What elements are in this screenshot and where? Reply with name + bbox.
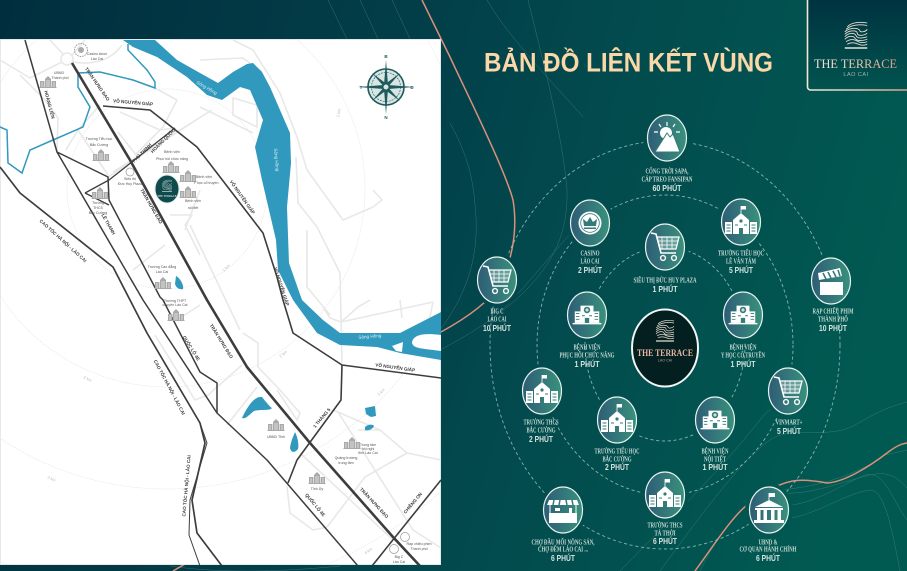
node: Big C Lào Cai: LÀO CAI — [488, 316, 507, 324]
node: Casino Lào Cai: CASINO — [580, 250, 600, 258]
node: Bệnh viện Nội tiết: NỘI TIẾT — [704, 456, 726, 464]
node: Chợ đầu mối nông sản: CHỢ ĐÊM LÀO CAI ... — [538, 546, 588, 554]
map points of interest: Y học cổ truyền — [194, 181, 218, 185]
node: Big C Lào Cai: 10 PHÚT — [483, 322, 512, 333]
roads — [0, 40, 441, 566]
node: Trường THCS Bắc Cường: TRƯỜNG THCS — [524, 418, 559, 426]
node: Trường Tiểu học Lê Văn Tám — [718, 199, 764, 275]
map project marker — [155, 175, 179, 203]
node: Rạp chiếu phim Thành phố — [812, 258, 854, 333]
node: Big C Lào Cai: BIG C — [490, 308, 504, 316]
map points of interest: Đức Huy Plaza — [118, 182, 142, 186]
node: Bệnh viện Phục hồi chức năng: 1 PHÚT — [574, 358, 600, 369]
node: Casino Lào Cai — [570, 200, 610, 275]
node: Chợ đầu mối nông sản: 6 PHÚT — [551, 552, 576, 563]
map points of interest: Lào Cai — [156, 270, 168, 274]
node: Bệnh viện Y học cổ truyền: 1 PHÚT — [730, 358, 756, 369]
map points of interest: Phục hồi chức năng — [156, 157, 188, 161]
node: Siêu thị Đức Huy Plaza — [634, 224, 696, 294]
node: Bệnh viện Nội tiết: BỆNH VIỆN — [702, 448, 728, 456]
node: Rạp chiếu phim Thành phố: RẠP CHIẾU PHIM — [812, 308, 854, 316]
node: Trường THCS Tả Thời: 6 PHÚT — [653, 535, 678, 546]
map panel: 1 km — [221, 263, 231, 273]
logo box: THE TERRACE — [814, 57, 897, 71]
road labels: TRẦN HƯNG ĐẠO — [209, 323, 235, 360]
node: Bệnh viện Nội tiết — [696, 397, 734, 472]
node: Trường THCS Tả Thời: TRƯỜNG THCS — [648, 522, 683, 530]
node: Siêu thị Đức Huy Plaza: 1 PHÚT — [652, 283, 678, 294]
map points of interest: THCS — [93, 206, 103, 210]
node: Siêu thị Đức Huy Plaza: SIÊU THỊ ĐỨC HUY PLAZA — [634, 276, 696, 284]
road labels: 1 THÁNG 5 — [311, 406, 332, 429]
node: Casino Lào Cai: LÀO CAI — [580, 258, 600, 266]
node: Cổng Trời Sapa — [642, 115, 692, 193]
map panel: 3 km — [376, 387, 386, 397]
map panel: 2 km — [278, 349, 288, 359]
node: Vinmart+: VINMART+ — [776, 418, 803, 426]
node: Rạp chiếu phim Thành phố: THÀNH PHỐ — [818, 316, 848, 324]
map points of interest: Trung tâm — [360, 443, 376, 447]
map points of interest: Casino Aeon — [87, 52, 107, 56]
node: Rạp chiếu phim Thành phố: 10 PHÚT — [819, 322, 848, 333]
road labels: CAO TỐC HÀ NỘI - LÀO CAI — [153, 358, 188, 416]
road labels: QUỐC LỘ 4E — [182, 334, 203, 362]
compass rose: B — [384, 54, 388, 59]
logo box — [808, 0, 907, 90]
map points of interest: Rạp chiếu phim — [407, 542, 431, 546]
road labels: VÕ NGUYÊN GIÁP — [273, 266, 292, 306]
map points of interest: Lào Cai — [393, 560, 405, 564]
node: Big C Lào Cai — [478, 257, 516, 333]
road labels: VÕ NGUYÊN GIÁP — [229, 178, 257, 215]
node: Bệnh viện Phục hồi chức năng: BỆNH VIỆN — [574, 344, 600, 352]
node: UBND và cơ quan hành chính: UBND & — [758, 538, 778, 546]
map points of interest: UBND — [54, 71, 64, 75]
map points of interest: tỉnh Lào Cai — [358, 451, 378, 455]
node: Cổng Trời Sapa: CỔNG TRỜI SAPA, — [646, 168, 689, 176]
map points of interest: Trường Cao đẳng — [148, 264, 176, 269]
road labels: HOÀNG LIÊN — [43, 90, 58, 120]
map panel: 4 km — [363, 546, 374, 555]
node: Trường Tiểu học Bắc Cường — [594, 397, 640, 472]
map project marker: THE TERRACE — [158, 195, 177, 198]
road labels: CAO TỐC HÀ NỘI - LÀO CAI — [179, 455, 192, 517]
centre logo: THE TERRACE — [637, 348, 693, 358]
road labels: PHÚ THỊNH — [131, 141, 153, 164]
road labels: VÕ NGUYÊN GIÁP — [375, 360, 416, 373]
map points of interest: Trường THPT — [164, 299, 187, 303]
map points of interest: Bắc Cường — [89, 210, 107, 215]
road labels: QUỐC LỘ 4E — [304, 491, 328, 517]
node: Cổng Trời Sapa: 60 PHÚT — [652, 182, 682, 193]
dashed distance rings — [490, 141, 840, 549]
road labels: CHIỀNG ON — [402, 490, 424, 515]
map points of interest: Bệnh viện — [164, 150, 180, 154]
node: Vinmart+: 5 PHÚT — [777, 425, 802, 436]
road labels — [38, 66, 424, 519]
node: Trường Tiểu học Bắc Cường: TRƯỜNG TIỂU HỌC — [594, 448, 640, 456]
node: Cổng Trời Sapa: CÁP TREO FANSIPAN — [642, 176, 692, 184]
node: Bệnh viện Y học cổ truyền: BỆNH VIỆN — [730, 344, 756, 352]
node: Chợ đầu mối nông sản — [532, 487, 595, 563]
map points of interest: Trường — [92, 201, 104, 205]
node: Trường THCS Bắc Cường — [522, 368, 562, 444]
node: Bệnh viện Y học cổ truyền — [721, 292, 765, 369]
map points of interest: Trường Tiểu học — [86, 137, 113, 141]
node: Trường THCS Tả Thời — [646, 472, 684, 546]
map points of interest: Bệnh viện — [185, 199, 201, 203]
node: UBND và cơ quan hành chính: CƠ QUAN HÀNH CHÍNH — [740, 546, 797, 554]
river: Sông Hồng — [0, 40, 441, 360]
node: UBND và cơ quan hành chính: 6 PHÚT — [756, 552, 781, 563]
node: Trường THCS Bắc Cường: BẮC CƯỜNG — [526, 426, 556, 434]
river: Sông Hồng: Sông Hồng — [196, 80, 218, 96]
node: Chợ đầu mối nông sản: CHỢ ĐẦU MỐI NÔNG SẢN, — [532, 538, 595, 546]
compass rose: T — [360, 85, 363, 90]
map points of interest: Bắc Cường — [90, 142, 108, 147]
node: Bệnh viện Phục hồi chức năng: PHỤC HỒI CHỨC NĂNG — [560, 352, 615, 360]
node: UBND và cơ quan hành chính — [740, 487, 797, 563]
road labels: TRẦN HƯNG ĐẠO — [84, 66, 112, 102]
lakes — [175, 276, 376, 452]
map points of interest: chuyên Lào Cai — [163, 303, 188, 307]
map points of interest: hội nghị — [362, 447, 374, 451]
map points of interest: Bệnh viện — [196, 175, 212, 179]
node: Trường THCS Bắc Cường: 2 PHÚT — [529, 433, 554, 444]
map panel: 2 km — [83, 374, 93, 383]
logo box: LAO CAI — [843, 72, 869, 78]
node: Bệnh viện Nội tiết: 1 PHÚT — [702, 461, 728, 472]
map points of interest: trung tâm — [338, 461, 354, 465]
centre logo — [632, 310, 698, 386]
map points of interest: Siêu thị — [124, 177, 136, 181]
map panel: 2 km — [335, 107, 342, 117]
river: Sông Hồng: Sông Hồng — [273, 148, 280, 172]
road labels: CAO TỐC HÀ NỘI - LÀO CAI — [38, 217, 89, 263]
map panel — [0, 39, 441, 565]
map panel: 3 km — [47, 475, 57, 483]
road labels: LÊ THANH — [100, 212, 118, 236]
node: Trường Tiểu học Lê Văn Tám: 5 PHÚT — [729, 264, 754, 275]
map points of interest: nội tiết — [188, 206, 198, 210]
map points of interest — [40, 44, 431, 564]
compass rose — [358, 54, 414, 120]
node: Casino Lào Cai: 2 PHÚT — [578, 264, 603, 275]
map points of interest: UBND Tỉnh — [267, 435, 285, 439]
node: Bệnh viện Y học cổ truyền: Y HỌC CỔ TRUYỀN — [721, 352, 765, 360]
compass rose: Đ — [410, 85, 414, 90]
map points of interest: Thành phố — [51, 76, 69, 80]
river: Sông Hồng: Sông Hồng — [358, 333, 382, 340]
node: Vinmart+ — [768, 368, 808, 436]
map points of interest: Tỉnh Ủy — [311, 486, 323, 491]
node: Trường Tiểu học Lê Văn Tám: TRƯỜNG TIỂU HỌC — [718, 250, 764, 258]
node halos — [473, 111, 855, 537]
road labels: HOÀNG QUỐC — [149, 127, 177, 154]
road labels: TRẦN HƯNG ĐẠO — [359, 486, 390, 519]
map points of interest: Lào Cai — [91, 57, 103, 61]
map points of interest: Big C — [395, 555, 404, 559]
map points of interest: Thành phố — [410, 547, 428, 551]
node: Trường Tiểu học Lê Văn Tám: LÊ VĂN TÁM — [726, 258, 756, 266]
compass rose: N — [384, 115, 388, 120]
road labels: VÕ NGUYÊN GIÁP — [113, 96, 153, 107]
map points of interest: Quảng trường — [335, 456, 357, 460]
node: Bệnh viện Phục hồi chức năng — [560, 292, 615, 369]
node: Trường Tiểu học Bắc Cường: BẮC CƯỜNG — [602, 456, 632, 464]
centre logo: LAO CAI — [658, 358, 672, 362]
road labels: TRẦN HƯNG ĐẠO — [139, 187, 164, 225]
title: BẢN ĐỒ LIÊN KẾT VÙNG — [484, 46, 773, 78]
node: Trường Tiểu học Bắc Cường: 2 PHÚT — [605, 461, 630, 472]
node: Trường THCS Tả Thời: TẢ THỜI — [654, 530, 676, 538]
